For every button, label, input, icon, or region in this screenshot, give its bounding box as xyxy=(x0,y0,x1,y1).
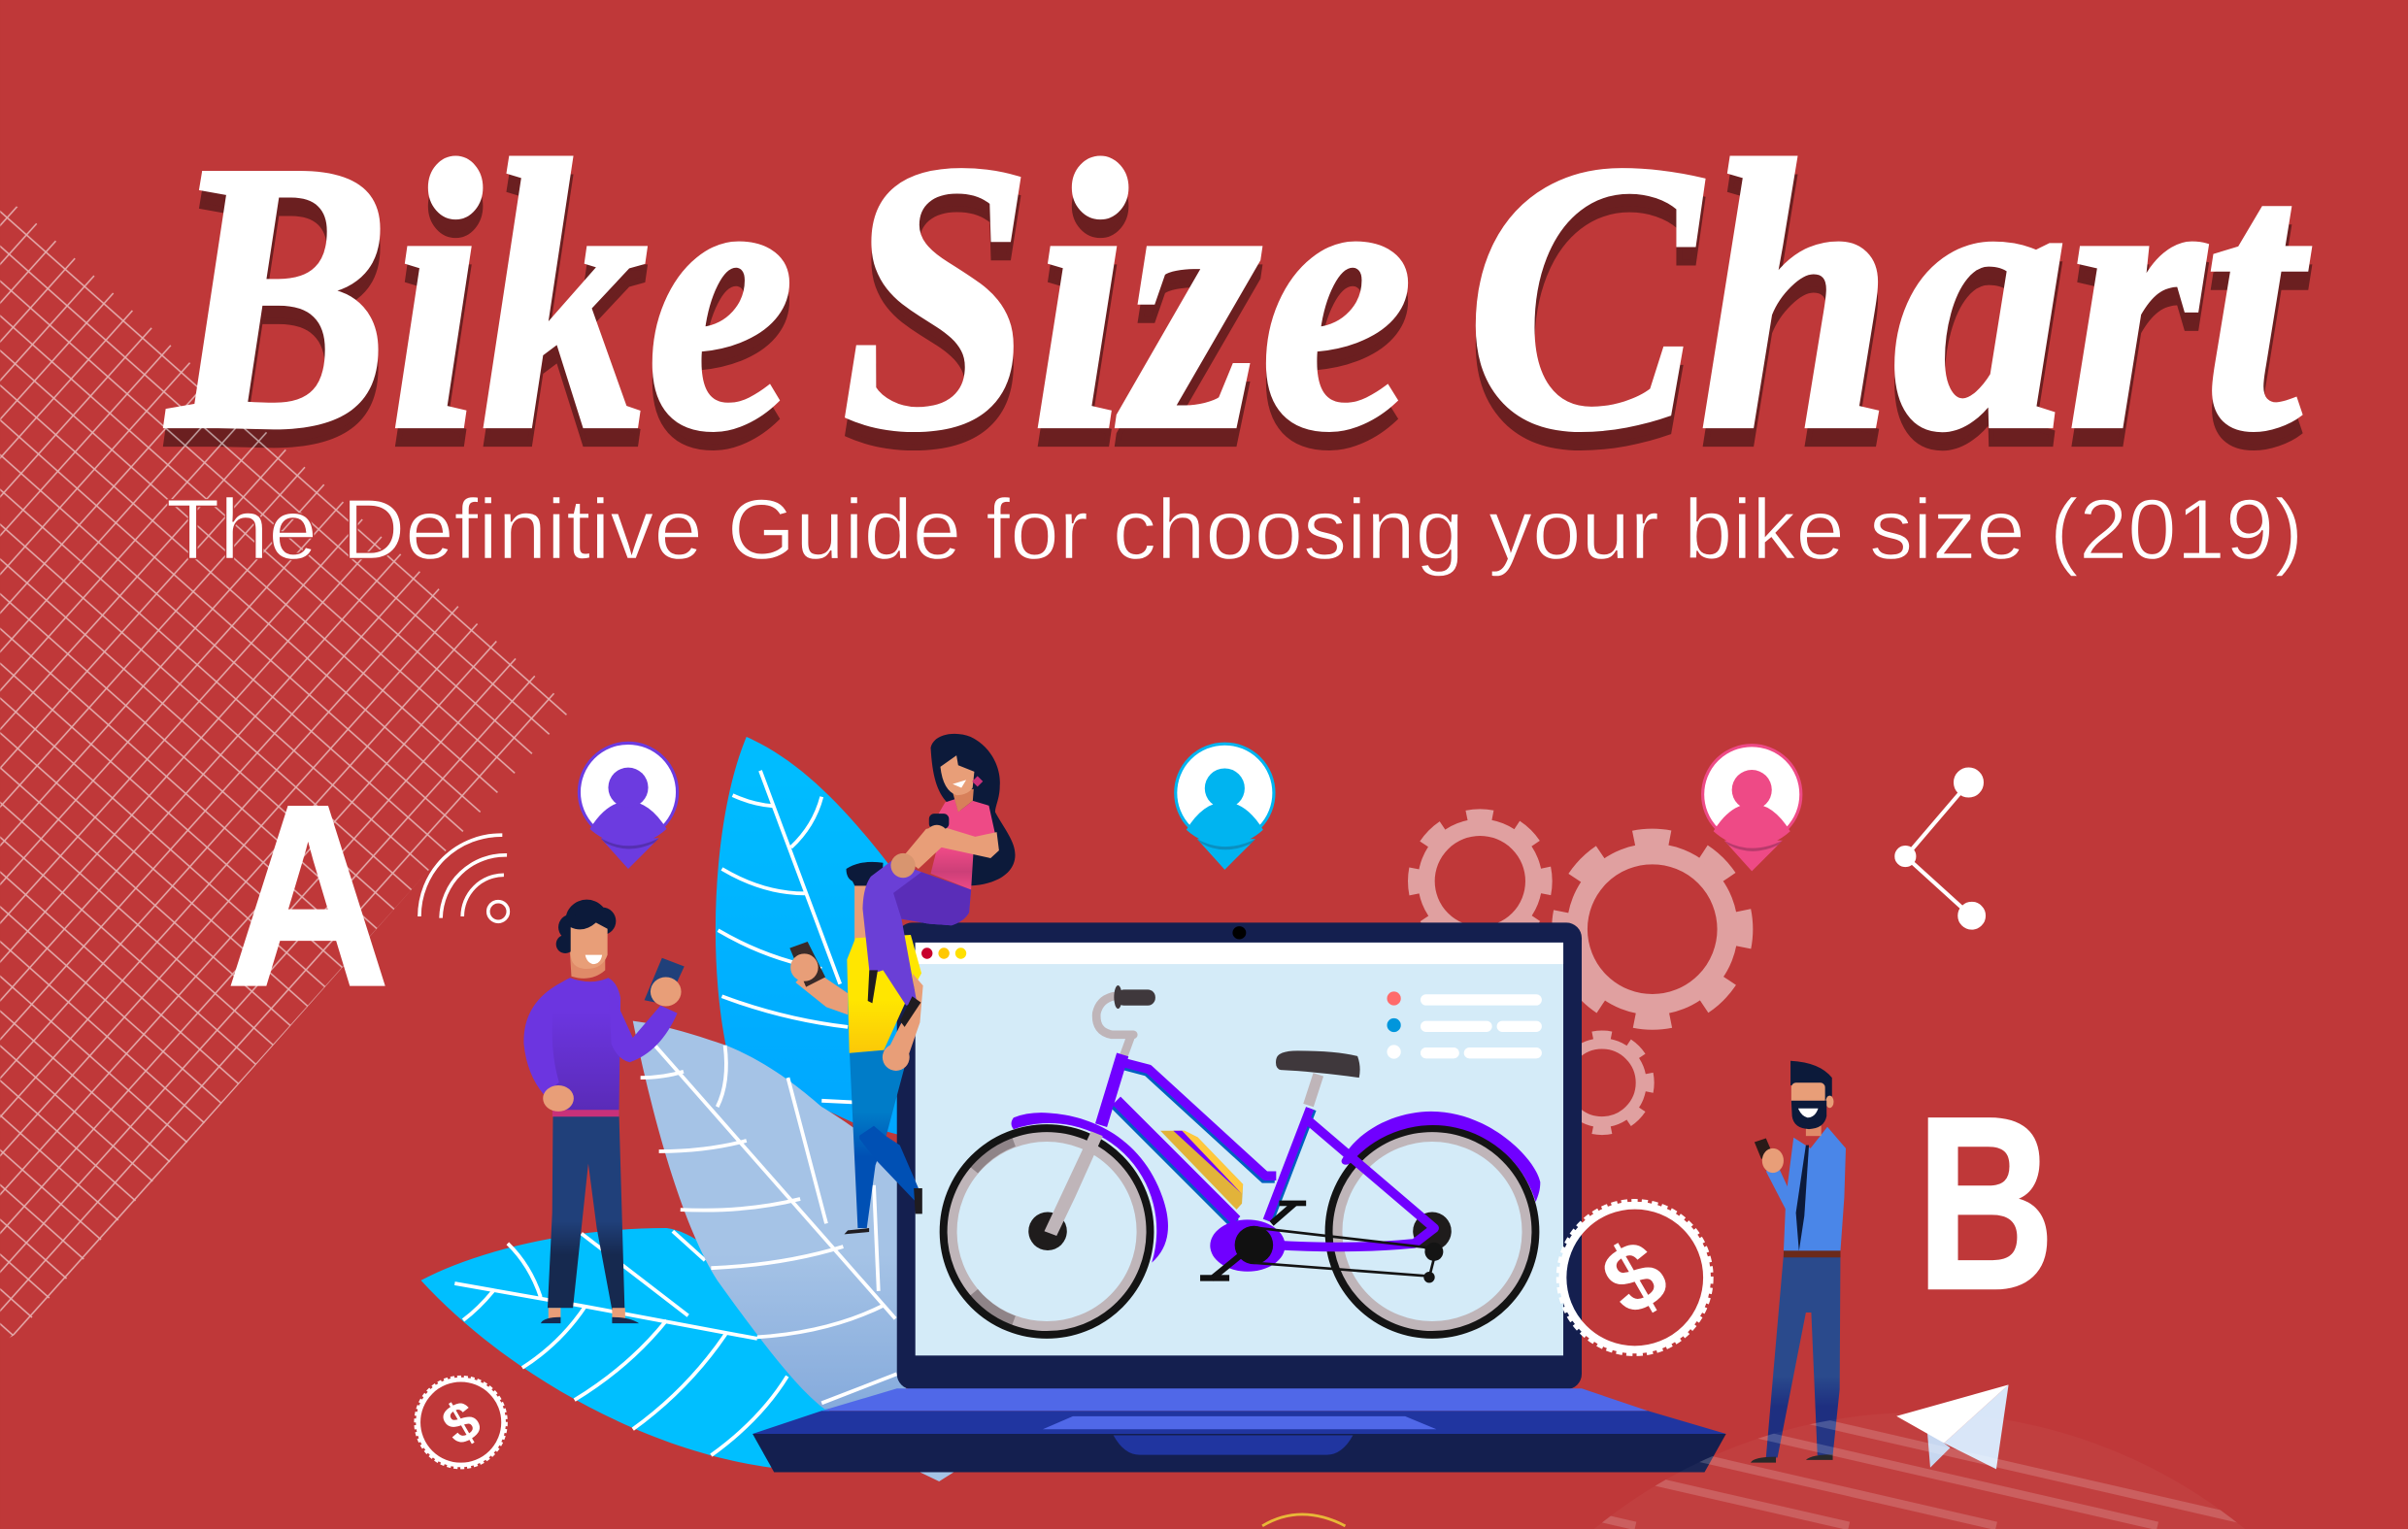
title: Chart xyxy=(1466,83,2313,509)
pin: purple xyxy=(579,743,678,869)
coin: small: $ xyxy=(432,1388,491,1458)
face xyxy=(571,922,608,969)
belt xyxy=(552,1109,619,1116)
smile xyxy=(1798,1109,1819,1117)
neck xyxy=(953,789,974,813)
shoes xyxy=(541,1317,639,1323)
hands xyxy=(651,978,682,1007)
neck xyxy=(570,951,605,979)
rear mudguard xyxy=(1342,1112,1540,1202)
phone xyxy=(789,942,825,987)
rear wheel xyxy=(1329,1128,1535,1335)
fork xyxy=(1045,1131,1103,1236)
frame xyxy=(1101,1054,1434,1246)
base top xyxy=(821,1388,1648,1411)
leaf: bottom xyxy=(421,1228,829,1468)
title xyxy=(164,83,2313,509)
base middle xyxy=(752,1411,1726,1434)
shoes xyxy=(1751,1454,1833,1463)
window dots xyxy=(921,947,966,959)
chain and derailleur xyxy=(1254,1227,1443,1282)
handlebar xyxy=(1096,996,1133,1054)
trackpad xyxy=(1043,1416,1436,1429)
pants xyxy=(862,861,971,1006)
paper plane xyxy=(1896,1384,2009,1469)
coin: large: $ xyxy=(1585,1217,1684,1337)
laptop screen legend xyxy=(1387,991,1542,1059)
person: man with phone xyxy=(523,900,685,1323)
torso xyxy=(550,978,620,1110)
front wheel xyxy=(944,1128,1150,1335)
shoes xyxy=(868,970,920,1027)
ear xyxy=(1825,1096,1834,1108)
arm xyxy=(1766,1167,1796,1215)
legs xyxy=(548,1113,624,1311)
belt xyxy=(1784,1250,1840,1257)
leaf: top xyxy=(716,737,903,1136)
seat post xyxy=(1309,1075,1319,1106)
coin: small xyxy=(416,1377,506,1468)
hubs xyxy=(1028,1212,1452,1250)
title shadow: Chart xyxy=(1466,102,2313,527)
title shadow: Size xyxy=(842,102,1413,527)
beard xyxy=(1791,1101,1826,1129)
neck xyxy=(1806,1120,1822,1136)
left arm xyxy=(523,978,571,1094)
shirt xyxy=(1784,1127,1846,1251)
shirt xyxy=(847,935,921,1053)
title shadow xyxy=(164,102,2313,527)
title: Bike xyxy=(164,83,794,509)
browser bar xyxy=(916,943,1563,964)
tie xyxy=(1796,1146,1809,1251)
gear: big xyxy=(1560,837,1745,1021)
right arm xyxy=(608,984,678,1062)
notch xyxy=(1114,1436,1353,1455)
other arm xyxy=(887,974,923,1058)
gear: small xyxy=(1555,1035,1650,1130)
smile xyxy=(953,780,966,788)
face xyxy=(1791,1082,1825,1106)
phone xyxy=(1755,1139,1773,1159)
raised leg xyxy=(859,1126,920,1200)
front mudguard xyxy=(1012,1113,1168,1263)
bicycle xyxy=(944,985,1540,1335)
pin: blue xyxy=(1176,744,1274,870)
head xyxy=(854,885,870,941)
base lower xyxy=(752,1434,1726,1472)
battery xyxy=(1160,1131,1243,1210)
icon: share xyxy=(1895,768,1985,929)
shoes xyxy=(844,1188,922,1234)
hand xyxy=(925,825,949,848)
face xyxy=(940,755,974,795)
lattice pattern xyxy=(0,200,571,1344)
person: bearded man in blue shirt xyxy=(1751,1061,1846,1463)
ankles xyxy=(549,1308,625,1318)
top xyxy=(929,799,995,890)
hand xyxy=(1762,1148,1784,1173)
arm with phone xyxy=(795,967,848,1014)
leaf tip under base xyxy=(920,1472,953,1481)
smile xyxy=(585,955,602,964)
arm xyxy=(903,826,999,869)
grip xyxy=(1114,985,1155,1009)
hand xyxy=(790,953,819,981)
standing leg xyxy=(850,1050,905,1228)
icon: wifi xyxy=(419,835,508,921)
camera xyxy=(1232,926,1246,939)
letter B: B xyxy=(1917,1066,2055,1341)
bottom bracket xyxy=(1210,1219,1285,1272)
pin: pink xyxy=(1703,746,1801,871)
phone xyxy=(645,958,685,1005)
thigh shade xyxy=(893,872,971,925)
gear: left xyxy=(1414,815,1546,947)
coin: large xyxy=(1558,1202,1711,1353)
hair xyxy=(556,900,616,953)
lid xyxy=(897,922,1582,1389)
yellow arc at bottom xyxy=(1262,1514,1345,1526)
title shadow: Bike xyxy=(164,102,794,527)
title: Size xyxy=(842,83,1413,509)
striped arc xyxy=(1602,1420,2237,1529)
hair xyxy=(847,862,884,890)
earring xyxy=(972,776,983,786)
frame shadow xyxy=(1115,1065,1312,1223)
letter A: A xyxy=(227,752,388,1039)
hair xyxy=(1790,1061,1832,1102)
gears xyxy=(1414,815,1745,1130)
knee xyxy=(890,853,916,878)
hair xyxy=(931,734,1015,885)
seat xyxy=(1276,1050,1360,1078)
person: woman sitting on laptop xyxy=(862,734,1015,1027)
subtitle: The Definitive Guide for choosing your bike size (2019) xyxy=(166,482,2303,578)
screen xyxy=(916,943,1563,1355)
person: man in yellow shirt xyxy=(789,862,923,1234)
phone xyxy=(929,814,949,829)
leaf: middle xyxy=(633,1021,906,1410)
crank and pedals xyxy=(1200,1201,1306,1281)
hand xyxy=(883,1044,910,1071)
laptop xyxy=(752,922,1726,1481)
trousers xyxy=(1766,1254,1840,1457)
